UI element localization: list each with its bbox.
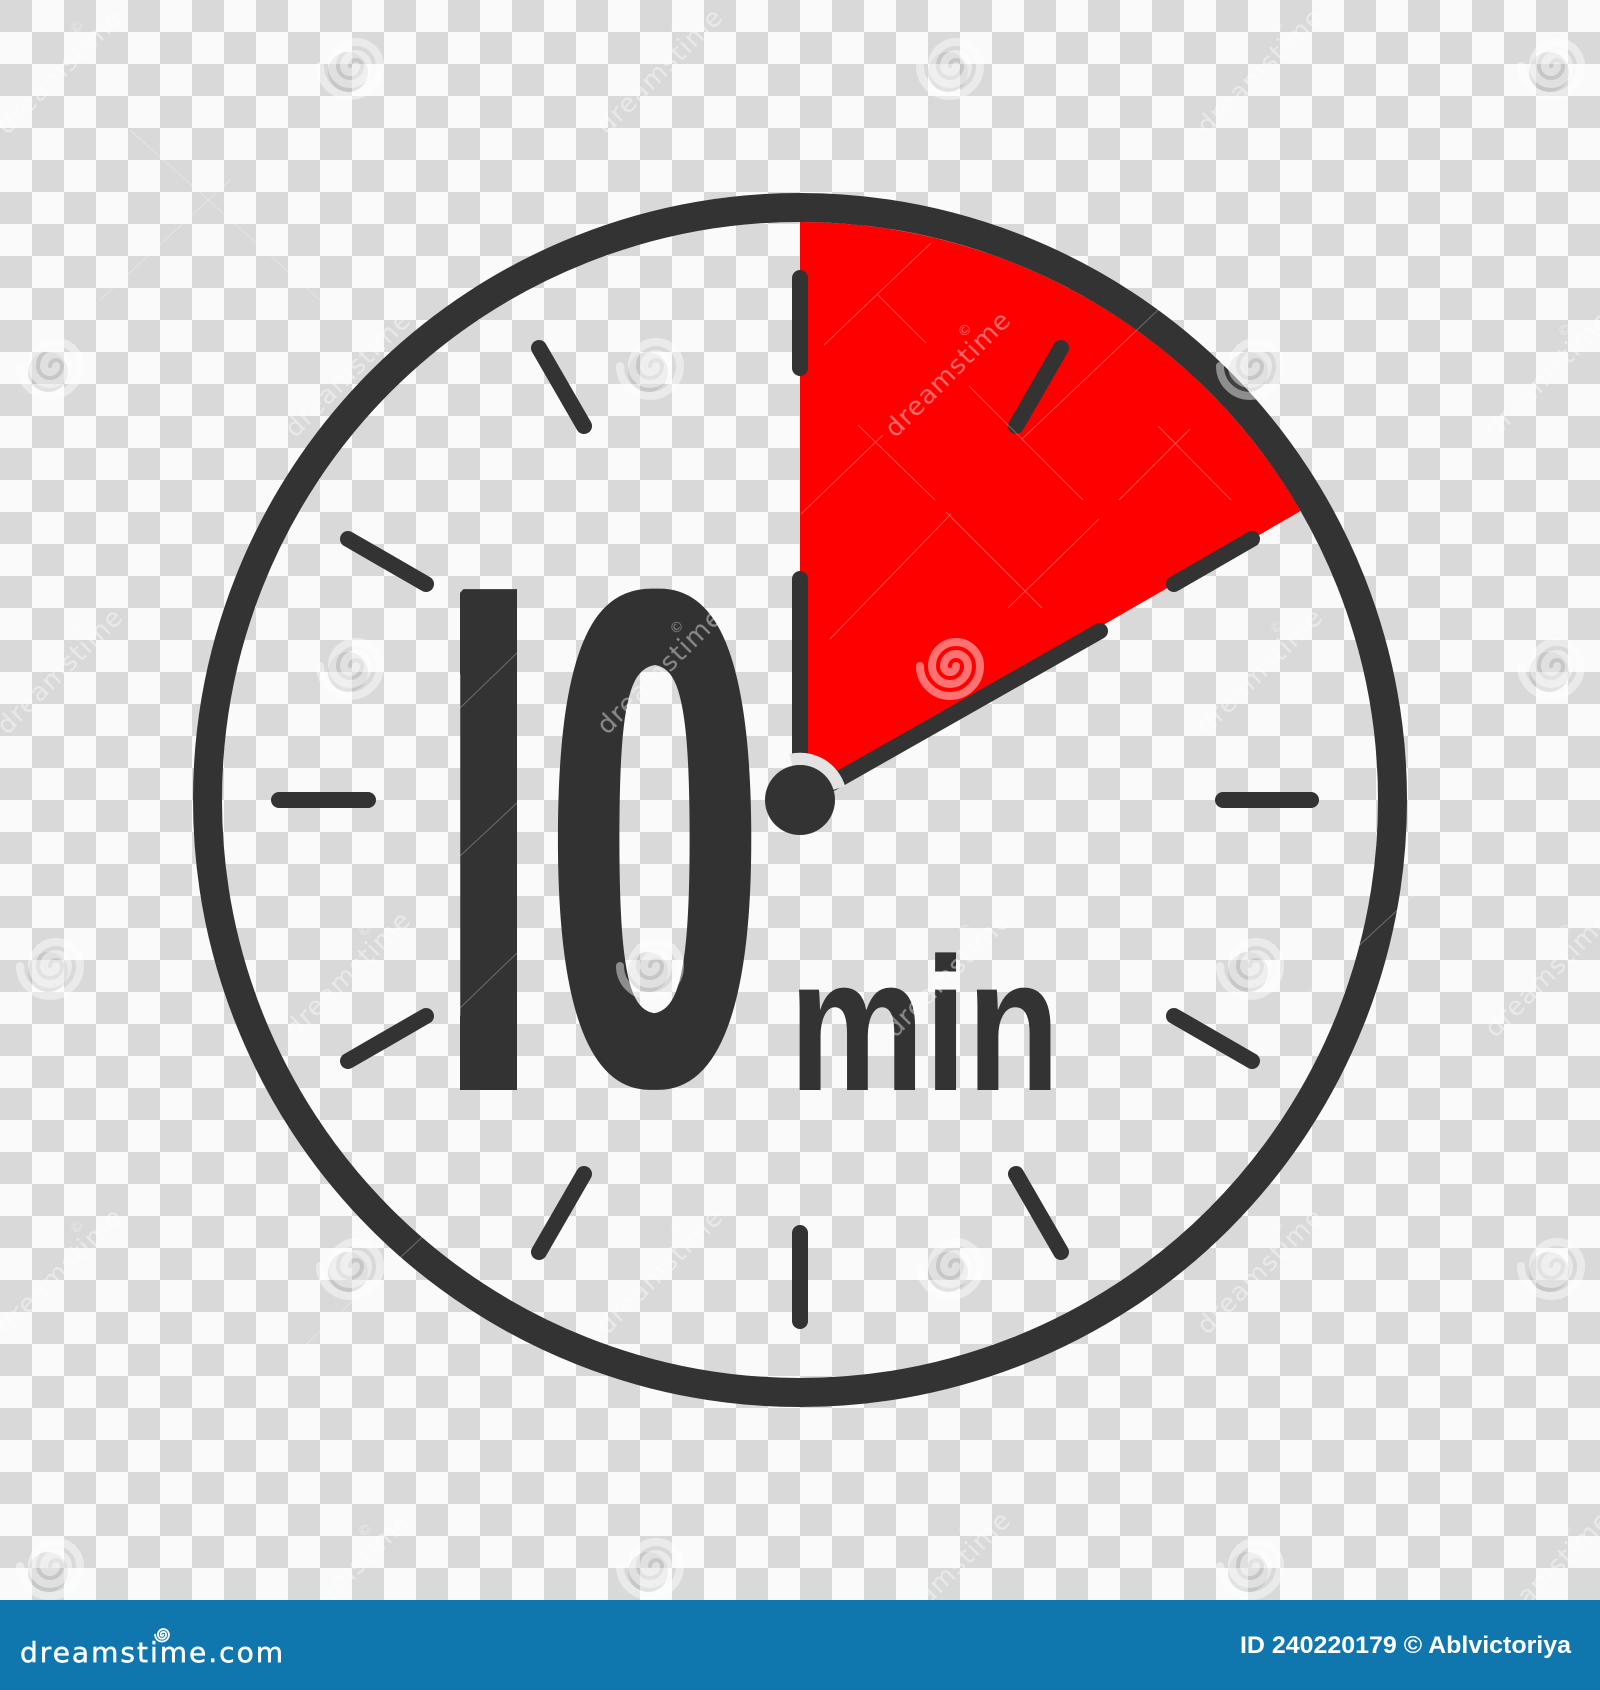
watermark text: © (67, 16, 89, 38)
watermark text: dreamstime (591, 2, 730, 141)
faint watermark grid lines (100, 130, 1430, 1350)
watermark text: © (67, 616, 89, 638)
watermark text: © (667, 616, 689, 638)
watermark text: © (355, 919, 377, 941)
watermark text: © (667, 1216, 689, 1238)
watermark text: dreamstime (279, 305, 418, 444)
watermark text: dreamstime (1191, 2, 1330, 141)
watermark text: © (67, 1216, 89, 1238)
watermark text: © (1555, 319, 1577, 341)
watermark text: dreamstime (879, 905, 1018, 1044)
watermark text: © (1555, 919, 1577, 941)
watermark text: © (955, 319, 977, 341)
footer bar (0, 1600, 1600, 1690)
watermark text: dreamstime (279, 905, 418, 1044)
watermark text: dreamstime (591, 602, 730, 741)
footer logo wordmark: dreamstime.com (20, 1636, 283, 1669)
watermark text: dreamstime (591, 1202, 730, 1341)
clock icon: 10 minute timer (208, 208, 1392, 1392)
clock outer ring (208, 208, 1392, 1392)
watermark text: © (955, 919, 977, 941)
image id and author credit: ID 240220179 © Ablvictoriya (1240, 1632, 1572, 1659)
hour tick marks (279, 278, 1311, 1321)
watermark text: © (1267, 16, 1289, 38)
watermark text: dreamstime (1191, 1202, 1330, 1341)
watermark text: dreamstime (879, 305, 1018, 444)
light ring around the pivot (791, 759, 839, 788)
watermark text: © (667, 16, 689, 38)
unit label min: min (789, 919, 1060, 1131)
watermark text: © (355, 1519, 377, 1541)
watermark text: dreamstime (279, 1505, 418, 1644)
number 10 (460, 588, 752, 1090)
red 10 minute sector (800, 222, 1301, 800)
watermark text: © (355, 319, 377, 341)
watermark text: © (1267, 1216, 1289, 1238)
watermark text: © (1555, 1519, 1577, 1541)
watermark text: © (1267, 616, 1289, 638)
digit 1: 1 (360, 431, 599, 1245)
watermark text: dreamstime (1191, 602, 1330, 741)
watermark text: dreamstime (879, 1505, 1018, 1644)
vertical clock hand (792, 571, 808, 766)
footer logo spiral (155, 1629, 169, 1642)
digit 0: 0 (546, 444, 763, 1234)
clock pivot dot (765, 765, 835, 835)
angled clock hand (832, 631, 1100, 783)
watermark text: © (955, 1519, 977, 1541)
